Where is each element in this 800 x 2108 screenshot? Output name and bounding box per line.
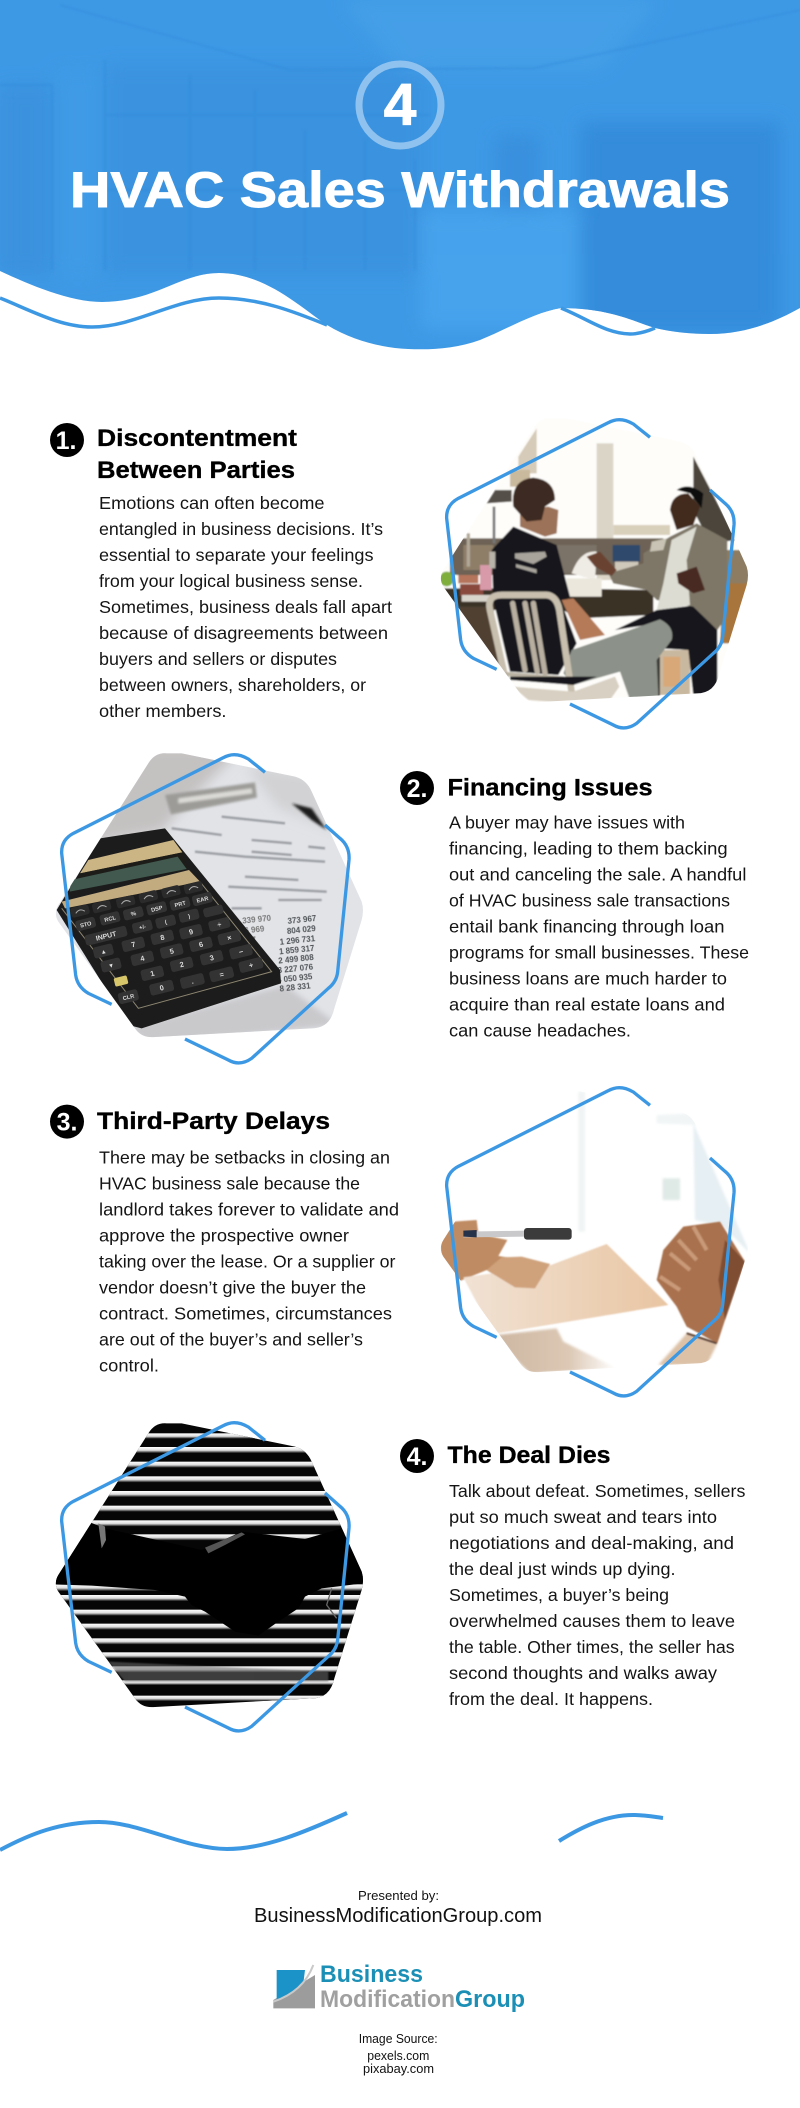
logo wordmark: Business <box>320 1961 423 1988</box>
body text 4: the deal just winds up dying. <box>449 1559 676 1579</box>
photo: calculator on financial papers: 1 296 731 <box>279 934 316 947</box>
body text 3: are out of the buyer’s and seller’s <box>99 1329 363 1349</box>
body text 2: A buyer may have issues with <box>449 812 685 832</box>
body text 2: out and canceling the sale. A handful <box>449 864 746 884</box>
photo: calculator on financial papers: +/- <box>139 924 147 932</box>
photo: calculator on financial papers: ▲ <box>100 949 107 956</box>
photo: calculator on financial papers: ÷ <box>216 920 222 929</box>
photo: calculator on financial papers: 1 859 317 <box>279 944 315 956</box>
body text 3: approve the prospective owner <box>99 1225 349 1245</box>
photo: calculator on financial papers: RCL <box>104 915 117 924</box>
body text 1: other members. <box>99 701 226 721</box>
right wave line <box>561 308 655 334</box>
section 1 <box>50 423 392 721</box>
logo icon <box>273 1965 315 2008</box>
section 3 <box>50 1105 399 1375</box>
photo: calculator on financial papers: 56 969 <box>240 924 265 936</box>
body text 4: the table. Other times, the seller has <box>449 1637 735 1657</box>
body text 3: control. <box>99 1355 159 1375</box>
photo: calculator on financial papers: = <box>219 970 225 979</box>
left wave line <box>0 298 327 327</box>
photo: calculator on financial papers: 373 967 <box>287 914 317 926</box>
section 2 <box>400 771 749 1040</box>
photo: calculator on financial papers: 6 <box>198 940 204 949</box>
body text 4: put so much sweat and tears into <box>449 1507 717 1527</box>
body text 4 <box>449 1481 746 1709</box>
heading 2: Financing Issues <box>448 774 652 802</box>
photo: calculator on financial papers: 8 28 331 <box>279 981 312 994</box>
body text 4: from the deal. It happens. <box>449 1689 653 1709</box>
photo: calculator on financial papers: 4 <box>139 953 146 963</box>
body text 4: second thoughts and walks away <box>449 1663 717 1683</box>
photo: two men talking <box>440 418 748 730</box>
photo: calculator on financial papers: ) <box>188 914 191 920</box>
photo: calculator on financial papers: 4 050 935 <box>277 972 313 985</box>
body text 1: essential to separate your feelings <box>99 545 374 565</box>
photo: calculator on financial papers: % <box>130 911 138 918</box>
body text 4: Talk about defeat. Sometimes, sellers <box>449 1481 746 1501</box>
body text 2: business loans are much harder to <box>449 968 727 988</box>
photo: calculator on financial papers: ( <box>164 920 168 926</box>
body text 2 <box>449 812 749 1040</box>
photo: calculator on financial papers: 3 <box>209 953 215 963</box>
badge 1: 1. <box>56 427 76 455</box>
badge 4: 4. <box>407 1443 427 1471</box>
body text 3: There may be setbacks in closing an <box>99 1147 390 1167</box>
logo wordmark: Modification <box>320 1986 455 2013</box>
photo: calculator on financial papers: 9 <box>188 927 194 937</box>
badge 2 <box>400 771 434 805</box>
hexagon outline 1 <box>447 420 734 728</box>
photo: calculator on financial papers: . <box>190 977 194 986</box>
photo: calculator on financial papers: EAR <box>196 896 209 905</box>
photo: calculator on financial papers: − <box>238 947 244 957</box>
photo: calculator on financial papers: × <box>226 933 233 943</box>
number ring and 4: 4 <box>384 72 417 138</box>
header banner with blurred office photo <box>0 0 800 360</box>
body text 3: taking over the lease. Or a supplier or <box>99 1251 396 1271</box>
photo: calculator on financial papers: + <box>248 960 254 970</box>
section 4 <box>400 1439 746 1709</box>
photo: calculator on financial papers: INPUT <box>95 931 118 943</box>
photo: calculator on financial papers: 817 <box>242 935 257 946</box>
body text 4: negotiations and deal-making, and <box>449 1533 734 1553</box>
heading 3: Third-Party Delays <box>97 1108 330 1135</box>
footer wave lines <box>0 1813 663 1850</box>
photo: calculator on financial papers: STO <box>80 921 93 930</box>
photo: calculator on financial papers: 1 <box>149 969 155 978</box>
presented by: Presented by: <box>358 1888 439 1903</box>
body text 1: buyers and sellers or disputes <box>99 649 337 669</box>
body text 2: programs for small businesses. These <box>449 942 749 962</box>
body text 1: Sometimes, business deals fall apart <box>99 597 392 617</box>
photo: calculator on financial papers: 339 970 <box>242 914 272 926</box>
photo: calculator on financial papers: 3 227 076 <box>277 962 314 975</box>
body text 4: overwhelmed causes them to leave <box>449 1611 735 1631</box>
photo: calculator on financial papers: 2 <box>179 960 185 969</box>
image source: pexels.com <box>367 2049 429 2063</box>
photo: calculator on financial papers: DSP <box>151 905 164 914</box>
photo: calculator on financial papers: 7 <box>130 940 136 949</box>
photo: calculator on financial papers: 804 029 <box>286 924 317 936</box>
hexagon outline 2 <box>62 755 349 1063</box>
photo: handshake silhouette behind blinds <box>56 1421 363 1733</box>
hexagon outline 3 <box>447 1088 734 1396</box>
website: BusinessModificationGroup.com <box>254 1905 542 1927</box>
body text 3: vendor doesn’t give the buyer the <box>99 1277 366 1297</box>
photo: calculator on financial papers: CLR <box>122 994 135 1002</box>
heading 1: Between Parties <box>97 457 295 484</box>
body text 1: between owners, shareholders, or <box>99 675 366 695</box>
heading 1: Discontentment <box>97 425 297 452</box>
body text 2: acquire than real estate loans and <box>449 994 725 1014</box>
body text 1: Emotions can often become <box>99 493 324 513</box>
body text 2: entail bank financing through loan <box>449 916 724 936</box>
number ring and 4 <box>359 64 441 146</box>
photo: calculator on financial papers: PRT <box>174 901 187 909</box>
body text 4: Sometimes, a buyer’s being <box>449 1585 669 1605</box>
hexagon outline 4 <box>62 1423 349 1731</box>
body text 2: can cause headaches. <box>449 1020 631 1040</box>
body text 1 <box>99 493 392 721</box>
body text 1: entangled in business decisions. It’s <box>99 519 383 539</box>
badge 2: 2. <box>407 775 427 803</box>
image source: Image Source: <box>359 2032 438 2046</box>
logo wordmark <box>320 1961 525 2013</box>
badge 3: 3. <box>57 1108 77 1136</box>
photo: calculator on financial papers: ▼ <box>108 963 115 970</box>
logo <box>273 1961 525 2013</box>
photo: calculator on financial papers: 0 <box>159 983 165 993</box>
image source: pixabay.com <box>363 2062 434 2076</box>
body text 1: from your logical business sense. <box>99 571 363 591</box>
photo: calculator on financial papers: 2 499 808 <box>278 953 315 966</box>
photo: calculator on financial papers: 5 <box>169 946 175 956</box>
photo: handing over a document <box>440 1086 748 1398</box>
heading 4: The Deal Dies <box>448 1442 610 1469</box>
body text 3: landlord takes forever to validate and <box>99 1199 399 1219</box>
badge 4 <box>400 1439 434 1473</box>
badge 1 <box>50 423 84 457</box>
logo wordmark: Group <box>455 1986 525 2013</box>
body text 3: HVAC business sale because the <box>99 1173 360 1193</box>
image source <box>359 2032 438 2076</box>
body text 3: contract. Sometimes, circumstances <box>99 1303 392 1323</box>
photo: calculator on financial papers: 8 <box>159 933 165 942</box>
title: HVAC Sales Withdrawals <box>70 162 730 218</box>
photo: calculator on financial papers <box>56 753 363 1065</box>
body text 2: financing, leading to them backing <box>449 838 728 858</box>
body text 2: of HVAC business sale transactions <box>449 890 730 910</box>
body text 3 <box>99 1147 399 1375</box>
heading 1 <box>97 425 297 484</box>
body text 1: because of disagreements between <box>99 623 388 643</box>
badge 3 <box>50 1105 84 1139</box>
